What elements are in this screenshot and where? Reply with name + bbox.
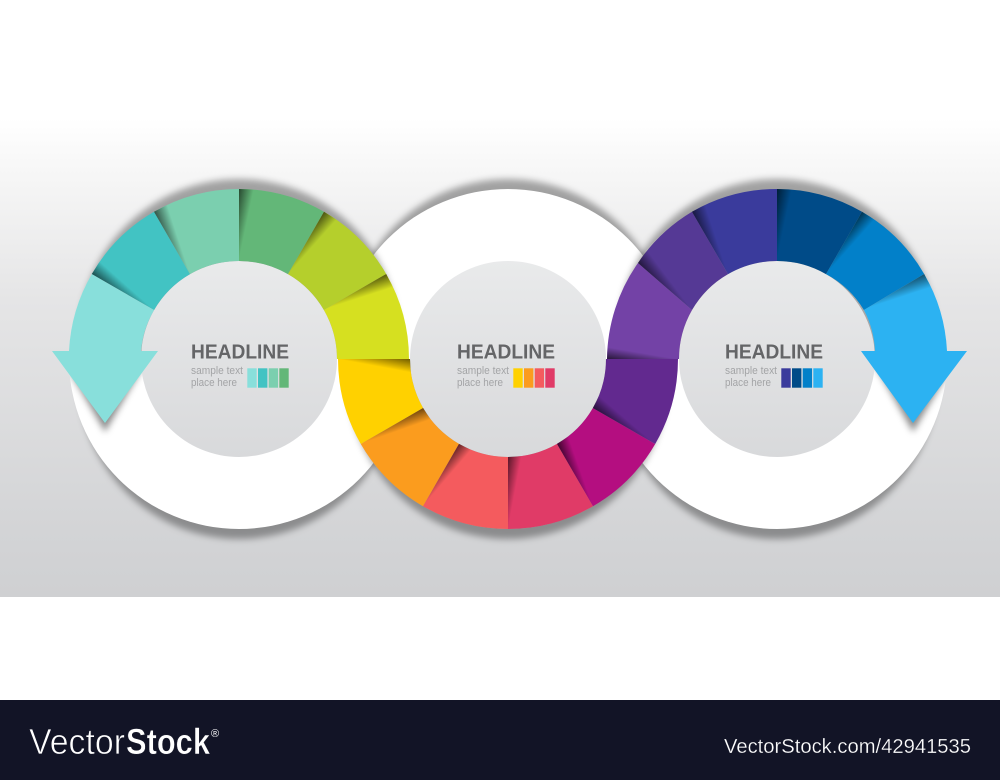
sample text: sample text <box>191 365 243 377</box>
sample text: place here <box>191 377 237 389</box>
text block: left circle <box>191 342 289 389</box>
fold shadows: right ring <box>607 189 931 359</box>
text block: right circle <box>725 342 823 389</box>
segment: lime <box>324 274 409 359</box>
fold shadows: left ring <box>92 189 393 310</box>
colour swatches <box>513 368 555 388</box>
sample text <box>191 365 243 389</box>
sample text: place here <box>725 377 771 389</box>
text block: middle circle <box>457 342 555 389</box>
segment: orange <box>361 408 459 506</box>
segment: mint <box>154 189 239 274</box>
white ring: left and right lower halves with shadows <box>69 189 947 539</box>
sample text <box>725 365 777 389</box>
shadow: right arrow tip <box>874 348 946 434</box>
footer logo: ® <box>211 728 219 740</box>
coloured arc: right ring <box>607 189 967 423</box>
white ring: middle upper half with shadow <box>338 179 678 529</box>
footer logo: Stock <box>126 721 211 762</box>
centre disc: left <box>141 261 337 457</box>
footer image id: VectorStock.com/42941535 <box>724 736 971 758</box>
centre disc: middle <box>410 261 606 457</box>
segment: green <box>239 189 324 274</box>
sample text: sample text <box>457 365 509 377</box>
segment: teal <box>92 212 190 310</box>
centre disc: right <box>679 261 875 457</box>
arrow: light cyan pointing down <box>52 274 158 423</box>
segment: navy <box>777 189 862 274</box>
segment: dark purple <box>593 359 678 444</box>
sample text: place here <box>457 377 503 389</box>
shadow: middle coloured arc <box>349 361 667 543</box>
segment: yellow <box>338 359 423 444</box>
shadow: left and right coloured arcs <box>80 175 936 357</box>
footer logo: Vector <box>29 721 125 762</box>
segment: indigo <box>692 189 777 274</box>
heading: HEADLINE <box>457 342 555 364</box>
segment: coral <box>423 444 508 529</box>
heading: HEADLINE <box>725 342 823 364</box>
shadow: left arrow tip <box>70 348 142 434</box>
segment: olive <box>288 212 386 310</box>
sample text <box>457 365 509 389</box>
heading: HEADLINE <box>191 342 289 364</box>
coloured arc: left ring <box>52 189 409 423</box>
segment: blue <box>826 212 924 310</box>
colour swatches <box>781 368 823 388</box>
colour swatches <box>247 368 289 388</box>
arrow: sky blue pointing down <box>861 274 967 423</box>
footer logo <box>29 721 219 762</box>
segment: purple <box>607 263 692 359</box>
sample text: sample text <box>725 365 777 377</box>
coloured arc: middle ring <box>338 359 678 529</box>
footer bar <box>0 700 1000 780</box>
fold shadows: middle ring <box>338 359 655 529</box>
grey gradient panel <box>0 118 1000 597</box>
segment: magenta <box>557 408 655 506</box>
segment: violet <box>638 212 728 310</box>
segment: crimson <box>508 444 593 529</box>
